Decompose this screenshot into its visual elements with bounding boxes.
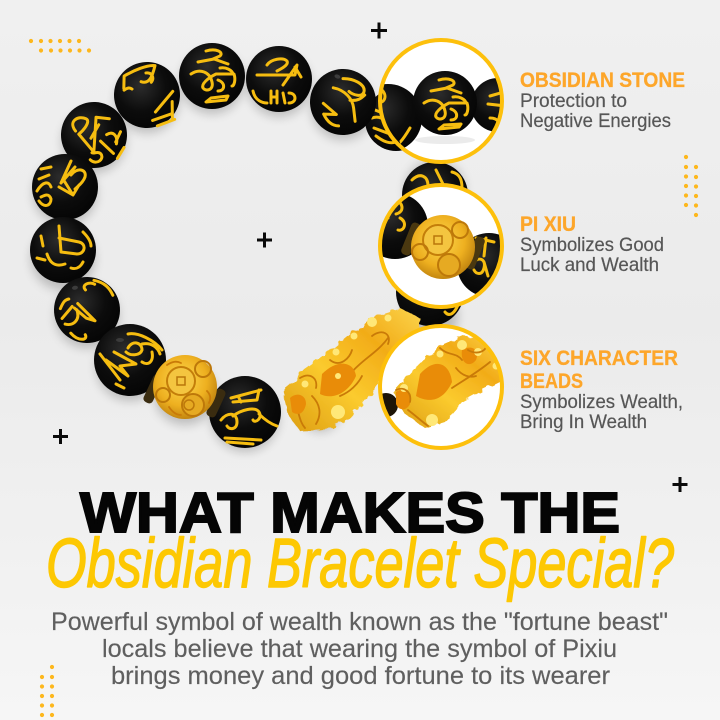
plus signs: [53, 22, 688, 492]
feature: six character beads: [520, 347, 683, 433]
bead 10: [209, 376, 281, 448]
feature: six character beads: SIX CHARACTER: [520, 347, 678, 370]
spacer: dark rings: [142, 373, 227, 419]
bead 7: [30, 217, 96, 283]
inset: pi xiu: [378, 183, 504, 309]
bead 8: [49, 272, 125, 348]
dots: top left: [29, 39, 91, 53]
bead 2: [246, 46, 312, 112]
feature: six character beads: Symbolizes Wealth,: [520, 391, 683, 413]
feature: obsidian stone: Protection to: [520, 90, 627, 112]
feature: six character beads: BEADS: [520, 370, 583, 393]
inset: six character beads: [374, 326, 508, 448]
feature: pi xiu: Symbolizes Good: [520, 234, 664, 256]
feature: pi xiu: PI XIU: [520, 213, 576, 236]
body text: locals believe that wearing the symbol of Pixiu: [102, 635, 617, 663]
body text: Powerful symbol of wealth known as the "fortune beast": [51, 608, 668, 636]
bead 6: [32, 154, 98, 220]
body text: [51, 608, 668, 690]
feature: obsidian stone: OBSIDIAN STONE: [520, 69, 685, 92]
gold bead: [153, 355, 217, 419]
bead 3: [179, 43, 245, 109]
feature: pi xiu: Luck and Wealth: [520, 254, 659, 276]
title: what makes the: WHAT MAKES THE: [80, 481, 620, 544]
bead: right lower hidden: [396, 258, 464, 326]
feature: pi xiu: [520, 213, 664, 276]
bead: right upper hidden: [402, 162, 468, 228]
dots: right: [684, 155, 698, 217]
body text: brings money and good fortune to its wearer: [111, 662, 610, 690]
bead 5: [52, 93, 136, 177]
bracelet shadow: [31, 50, 465, 452]
bead 4: [110, 58, 184, 132]
bracelet: [30, 43, 468, 448]
pixiu charm: [283, 308, 420, 431]
feature: obsidian stone: [520, 69, 685, 132]
bead 1: [301, 60, 385, 144]
feature: obsidian stone: Negative Energies: [520, 110, 671, 132]
inset: obsidian stone: [378, 38, 504, 164]
feature: six character beads: Bring In Wealth: [520, 411, 647, 433]
bead 9: [94, 324, 166, 396]
dots: bottom left: [40, 665, 54, 717]
bead: upper right: [365, 89, 427, 151]
